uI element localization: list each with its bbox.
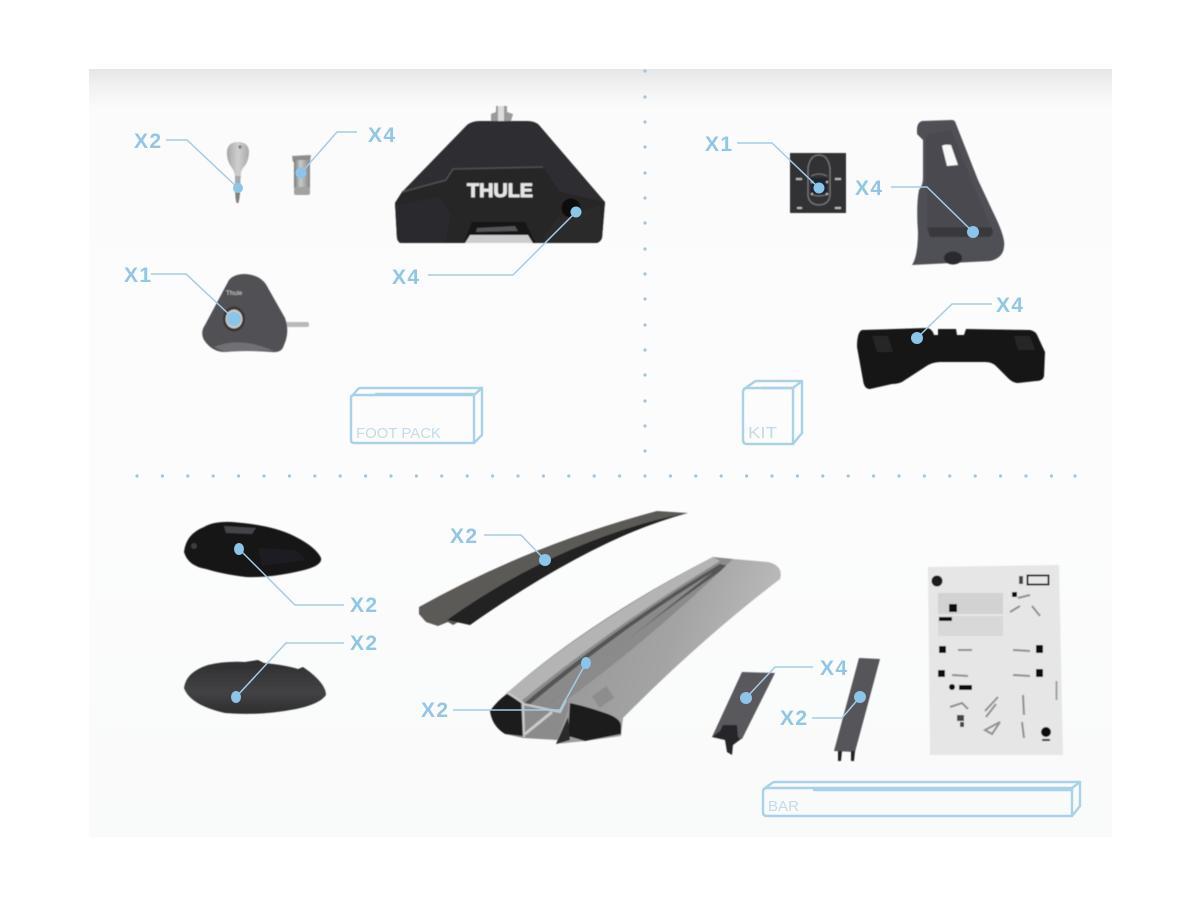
background panel: [89, 69, 1112, 837]
callout: X2 rubber strips: X2: [450, 525, 478, 548]
callout: X2 inner end caps: [234, 543, 378, 617]
callout: X1 plate: X1: [705, 133, 734, 156]
box label: BAR: [768, 799, 799, 815]
end cap inner: [184, 522, 321, 577]
icon: key knob: Thule: [226, 290, 243, 297]
box label: FOOT PACK: [356, 426, 441, 442]
callout: X4 brackets: X4: [855, 177, 884, 200]
callout: X1 knob: X1: [124, 264, 152, 287]
vertical dotted divider: [643, 69, 647, 453]
vehicle fitting plate: [790, 153, 846, 213]
callout: X4 short covers: X4: [820, 657, 848, 680]
box label: KIT: [748, 425, 777, 442]
icon: key: [227, 142, 249, 203]
callout: X2 inner end caps: X2: [350, 594, 378, 617]
long slot cover: [834, 658, 880, 761]
rubber strip: [419, 511, 688, 626]
callout: X4 feet: X4: [392, 266, 420, 289]
callout: X2 long covers: X2: [780, 707, 808, 730]
callout: X2 bars: [421, 657, 591, 722]
callout: X2 rubber strips: [450, 525, 551, 566]
panel: kit: [705, 120, 1045, 444]
bar box icon: [763, 782, 1080, 816]
callout: X2 keys: X2: [134, 130, 162, 153]
icon: key knob: [202, 274, 309, 352]
panel: bar: [184, 511, 1080, 816]
instruction sheet: [928, 565, 1063, 755]
horizontal dotted divider: [135, 474, 1077, 478]
callout: X2 keys: [134, 130, 243, 193]
callout: X4 pads: X4: [996, 294, 1024, 317]
callout: X2 outer end caps: X2: [350, 632, 378, 655]
callout: X2 long covers: [780, 691, 866, 730]
aluminium bar: [490, 557, 781, 744]
mounting bracket: [912, 120, 1004, 265]
callout: X4 short covers: [740, 657, 848, 704]
callout: X4 lock cylinders: X4: [368, 124, 396, 147]
icon: lock cylinder: [292, 155, 311, 195]
panel: foot pack: [124, 106, 605, 443]
callout: X4 lock cylinders: [296, 124, 396, 178]
foot with Thule logo: [395, 106, 605, 243]
callout: X4 brackets: [855, 177, 979, 238]
short slot cover: [712, 672, 775, 755]
foot pack box icon: [351, 388, 482, 443]
callout: X4 feet: [392, 206, 582, 289]
kit box icon: [743, 381, 802, 444]
callout: X4 pads: [911, 294, 1024, 344]
rubber pad: [857, 328, 1045, 389]
end cap outer: [184, 660, 326, 714]
callout: X2 bars: X2: [421, 699, 450, 722]
callout: X1 plate: [705, 133, 824, 194]
callout: X2 outer end caps: [231, 632, 378, 703]
callout: X1 knob: [124, 264, 241, 326]
Thule logo text: THULE: [467, 181, 533, 202]
